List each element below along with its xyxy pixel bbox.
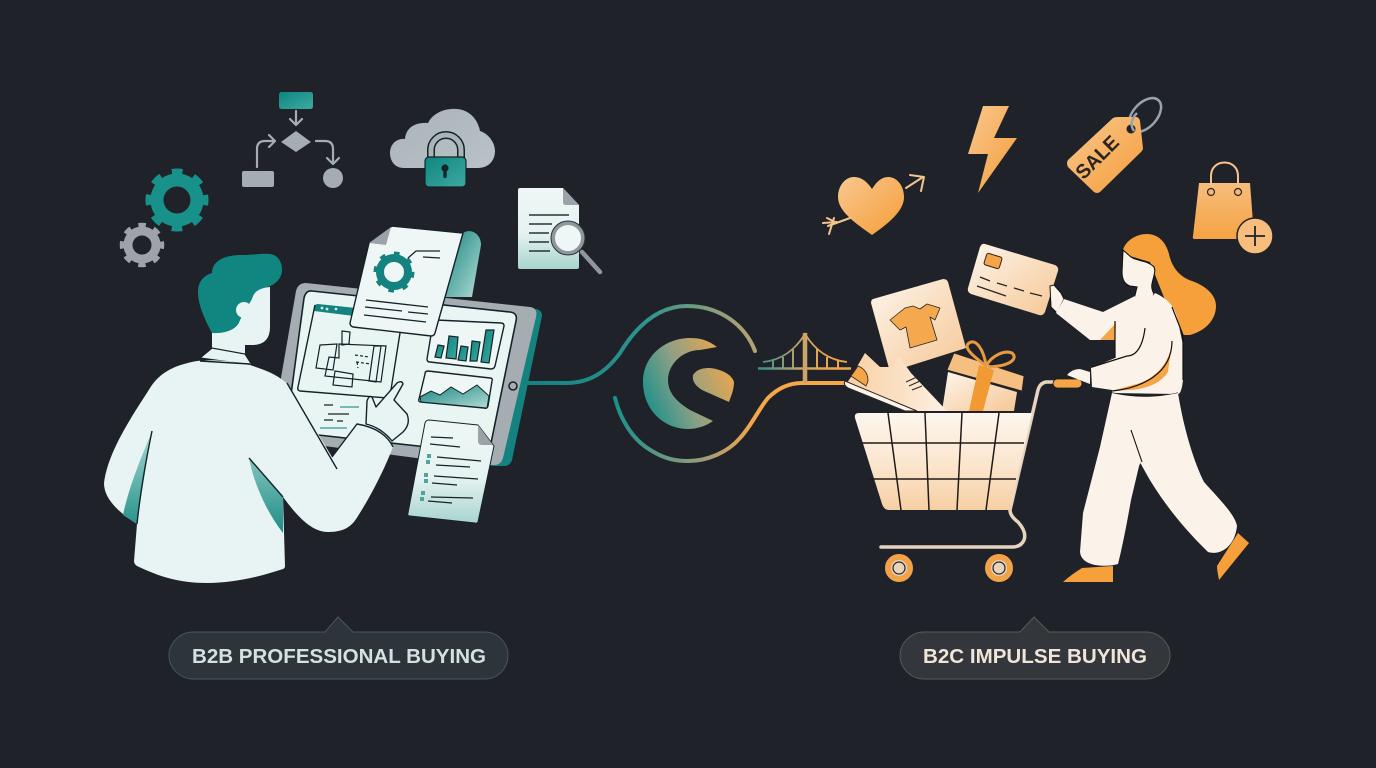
logo mark <box>643 338 734 429</box>
sneaker <box>844 353 947 411</box>
bar chart card <box>427 320 504 369</box>
icon: document with magnifier <box>518 188 600 272</box>
man seen from behind <box>104 254 408 583</box>
left shoe <box>1063 566 1113 582</box>
icon: flowchart <box>242 92 343 188</box>
right shoe <box>1217 533 1249 580</box>
arm crease and outlines <box>137 361 393 524</box>
face and neck <box>1122 250 1155 302</box>
hair <box>1123 234 1216 335</box>
woman with cart <box>1050 234 1249 582</box>
gift box <box>942 342 1024 411</box>
torso and arm <box>104 360 393 583</box>
shaded folds <box>123 431 283 533</box>
torso and sleeves <box>1056 293 1183 394</box>
label: B2B professional buying: B2B PROFESSIONAL BUYING <box>192 645 486 668</box>
cart basket <box>855 413 1032 510</box>
label: B2C impulse buying <box>900 617 1170 679</box>
cart frame <box>881 382 1053 547</box>
clothing outlines <box>1092 307 1183 396</box>
label: B2C impulse buying: B2C IMPULSE BUYING <box>923 645 1147 668</box>
ear <box>236 302 252 318</box>
lower connecting curve <box>615 383 846 461</box>
hand on handle <box>1067 369 1090 384</box>
panel: B2B professional buyer <box>104 92 755 679</box>
browser window with blueprint <box>298 304 400 428</box>
pointing hand <box>366 382 408 441</box>
wheel right <box>988 557 1010 579</box>
scroll document with gear <box>350 226 481 336</box>
icon: teal gear <box>150 173 204 227</box>
tablet with dashboard <box>272 283 542 466</box>
icon: bridge <box>758 333 851 383</box>
icon: lightning bolt <box>968 106 1017 193</box>
icon: shopping bag with plus <box>1193 162 1273 254</box>
icon: cloud with padlock <box>390 109 495 187</box>
panel: bridge logo connector <box>615 333 851 461</box>
face and neck <box>200 287 270 366</box>
icon: heart with arrow <box>823 175 924 235</box>
shopping cart <box>855 379 1082 579</box>
label: B2B professional buying <box>169 617 508 679</box>
handle <box>1053 379 1082 388</box>
area chart card <box>419 371 492 408</box>
trousers <box>1080 393 1237 566</box>
collar <box>200 348 252 365</box>
panel: B2C impulse shopper <box>823 92 1273 679</box>
leg crease <box>1131 430 1142 462</box>
basket grid <box>861 413 1024 510</box>
hair <box>198 254 282 333</box>
orange inner leg <box>1130 432 1142 476</box>
checklist document <box>408 420 494 523</box>
t-shirt product card <box>871 279 966 372</box>
credit card <box>968 244 1058 315</box>
icon: sale tag: SALE <box>1072 132 1124 184</box>
connector from tablet <box>528 306 755 383</box>
wheel left <box>888 557 910 579</box>
sleeve and belly shading <box>1100 323 1172 390</box>
icon: sale tag <box>1067 92 1167 193</box>
hand holding card <box>1050 285 1064 313</box>
icon: grey gear <box>123 226 161 264</box>
